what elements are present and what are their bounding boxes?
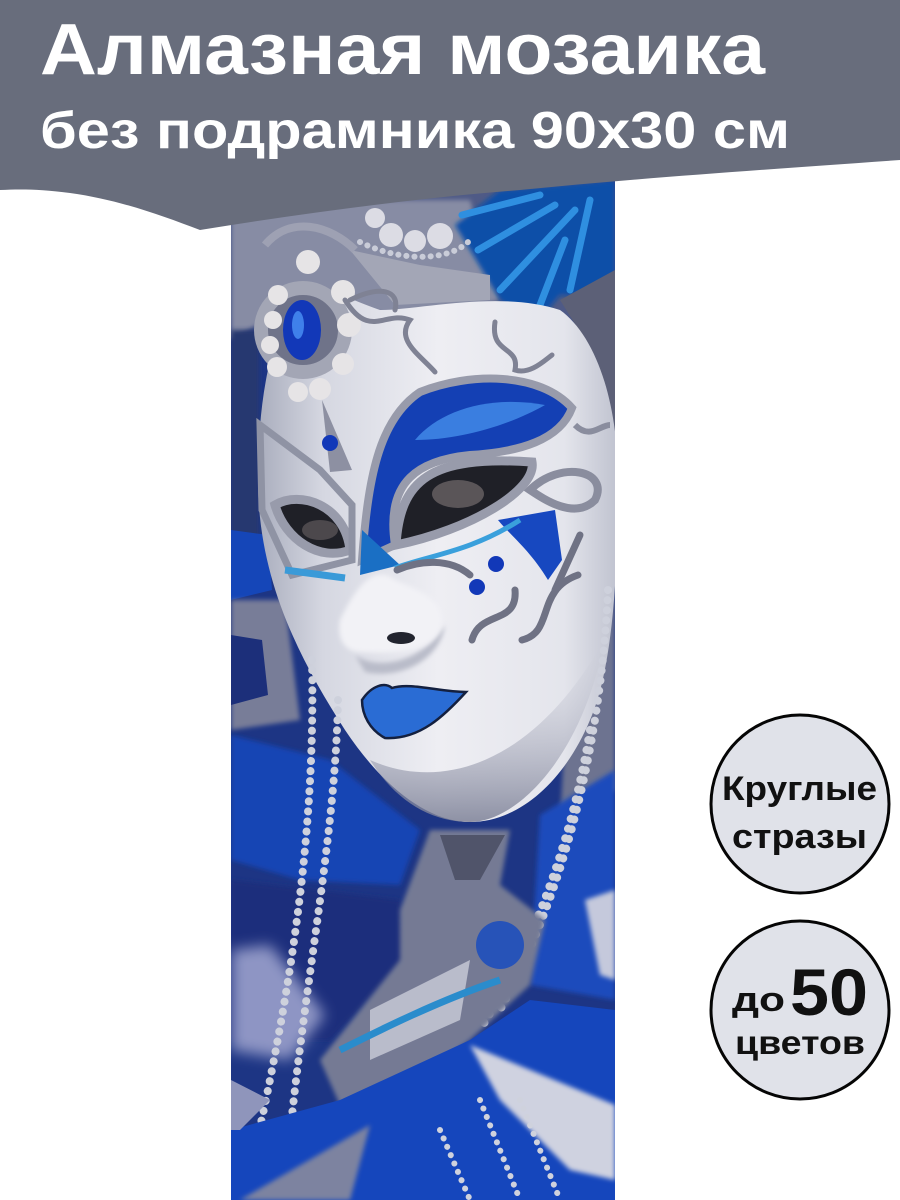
cheek ornament — [397, 535, 580, 640]
mask illustration — [231, 180, 618, 1200]
nostril — [387, 632, 415, 644]
mask face — [258, 294, 618, 822]
forehead ornaments — [345, 291, 552, 372]
header banner — [0, 0, 900, 230]
subtitle: без подрамника 90х30 см — [40, 102, 790, 160]
badge: up to 50 colors: цветов — [735, 1024, 865, 1061]
lips — [362, 685, 466, 738]
badge: round rhinestones — [711, 715, 889, 893]
headdress — [231, 182, 615, 431]
badge: up to 50 colors — [711, 921, 889, 1099]
badge: up to 50 colors: 50 — [790, 955, 868, 1029]
background costume left — [231, 330, 615, 1060]
badge: up to 50 colors: до — [732, 981, 785, 1019]
badge: round rhinestones: стразы — [732, 818, 867, 856]
badge: round rhinestones: Круглые — [722, 770, 877, 808]
blue eye decoration — [260, 379, 610, 580]
blue costume bottom — [231, 1000, 615, 1200]
forehead jewel — [261, 250, 361, 472]
title: Алмазная мозаика — [40, 10, 766, 90]
collar jewels — [320, 830, 545, 1105]
pearl strands — [257, 586, 612, 1122]
